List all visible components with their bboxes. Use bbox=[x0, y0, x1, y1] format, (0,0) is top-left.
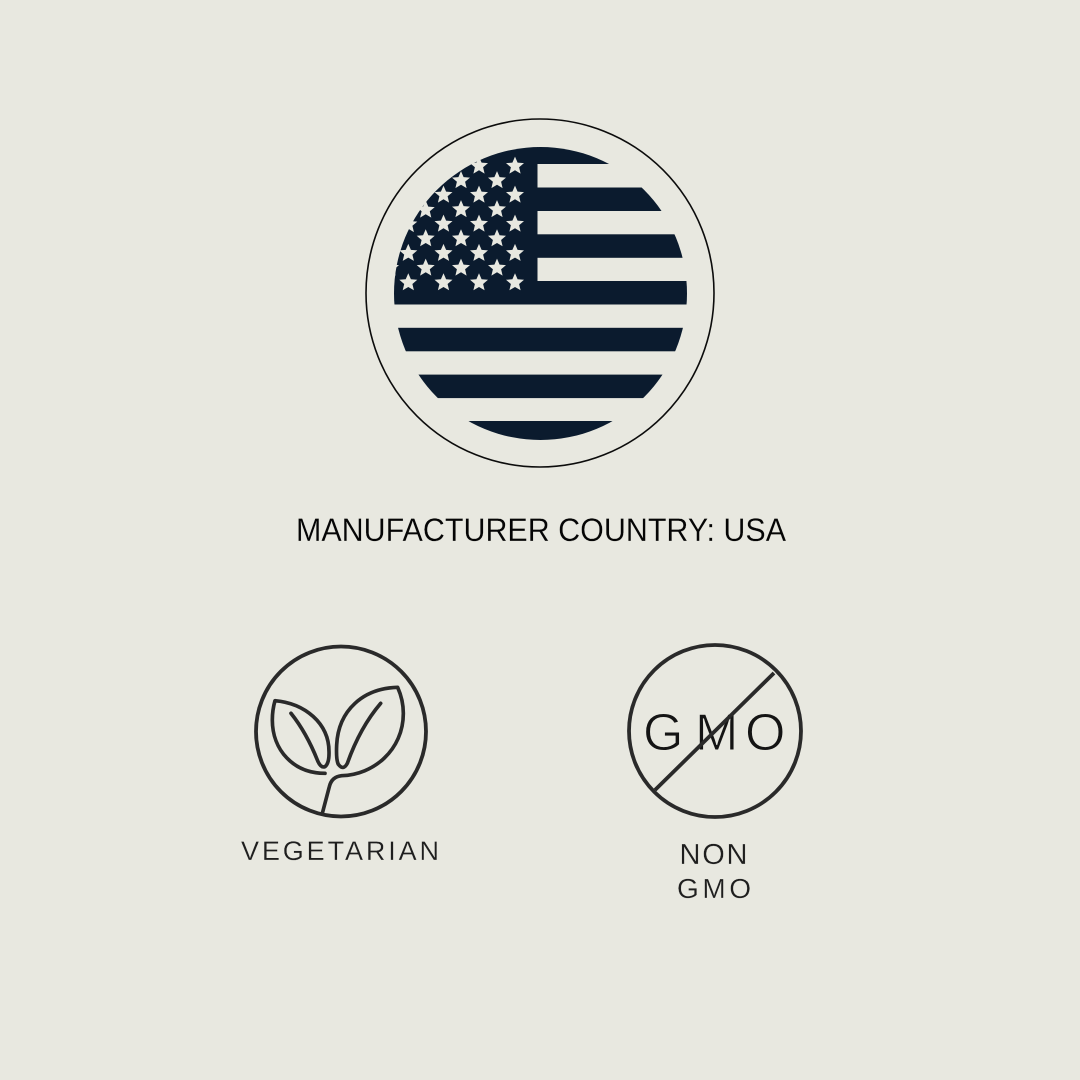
label: vegetarian: VEGETARIAN bbox=[241, 836, 439, 866]
label line: NON: NON bbox=[680, 839, 748, 871]
icon GMO lettering: GMO bbox=[643, 704, 785, 762]
flag stripes and canton bbox=[394, 147, 687, 441]
flag stars bbox=[381, 157, 524, 290]
flag outer ring bbox=[366, 119, 714, 467]
icon: non-GMO crossed circle bbox=[629, 645, 801, 817]
label line: GMO: GMO bbox=[677, 873, 751, 904]
non-GMO ring bbox=[629, 645, 801, 817]
slash bbox=[655, 673, 774, 790]
label: non GMO bbox=[677, 839, 751, 904]
icon: USA flag badge bbox=[366, 119, 714, 467]
icon: vegetarian leaves bbox=[256, 646, 426, 816]
vegetarian ring bbox=[256, 646, 426, 816]
heading: manufacturer country: MANUFACTURER COUNTRY: USA bbox=[296, 512, 787, 548]
leaves and stem bbox=[272, 687, 403, 813]
